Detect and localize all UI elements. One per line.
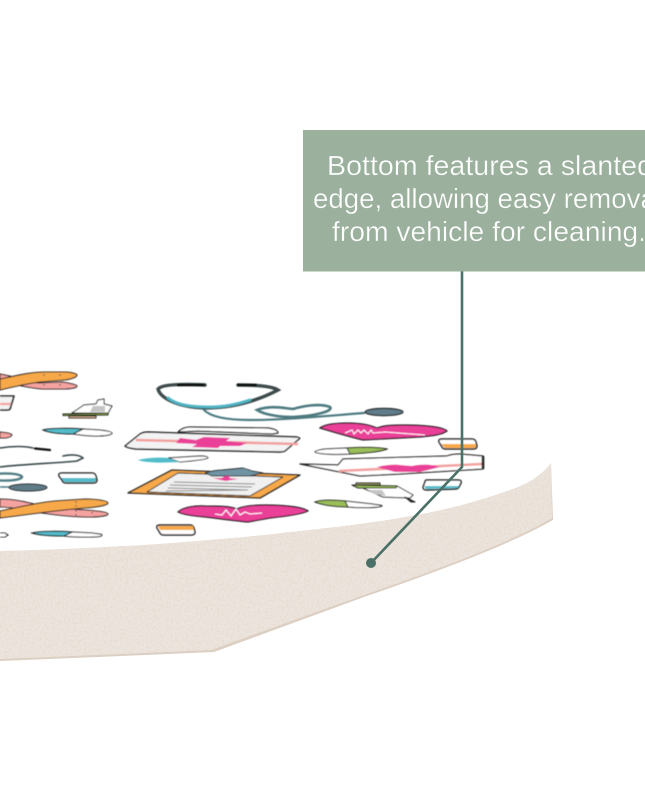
pill teal left upper <box>43 428 112 436</box>
capsule orange right <box>439 439 477 449</box>
stethoscope left <box>0 446 83 467</box>
syringe right <box>352 483 415 502</box>
pill teal lower left <box>32 531 102 537</box>
pill green lower right <box>315 500 382 508</box>
heart centre <box>178 505 308 522</box>
kit fragment left <box>0 396 14 410</box>
callout text <box>313 150 645 247</box>
pill green upper right <box>315 447 387 454</box>
callout text: Bottom features a slanted <box>327 150 645 181</box>
stethoscope head right <box>365 408 403 416</box>
syringe left <box>63 399 112 418</box>
first aid kit centre <box>125 427 300 452</box>
capsule teal left <box>59 473 97 483</box>
first aid kit right <box>300 454 483 476</box>
clipboard <box>128 468 300 498</box>
stethoscope ring and head left <box>0 474 47 491</box>
capsule orange centre <box>157 525 195 535</box>
callout text: from vehicle for cleaning. <box>332 216 645 247</box>
coaster side edge <box>0 463 553 661</box>
bandage top left <box>0 372 77 390</box>
capsule teal right <box>423 480 461 490</box>
pill teal centre <box>138 456 208 463</box>
callout connector line <box>371 271 462 563</box>
callout dot <box>366 558 376 568</box>
bandage lower left <box>0 499 108 518</box>
heart top right <box>320 423 447 440</box>
heart fragment left <box>0 432 12 438</box>
callout panel <box>303 130 645 272</box>
pill fragment far left <box>0 533 8 537</box>
medical icon pattern <box>0 372 483 537</box>
stethoscope centre <box>158 384 364 420</box>
